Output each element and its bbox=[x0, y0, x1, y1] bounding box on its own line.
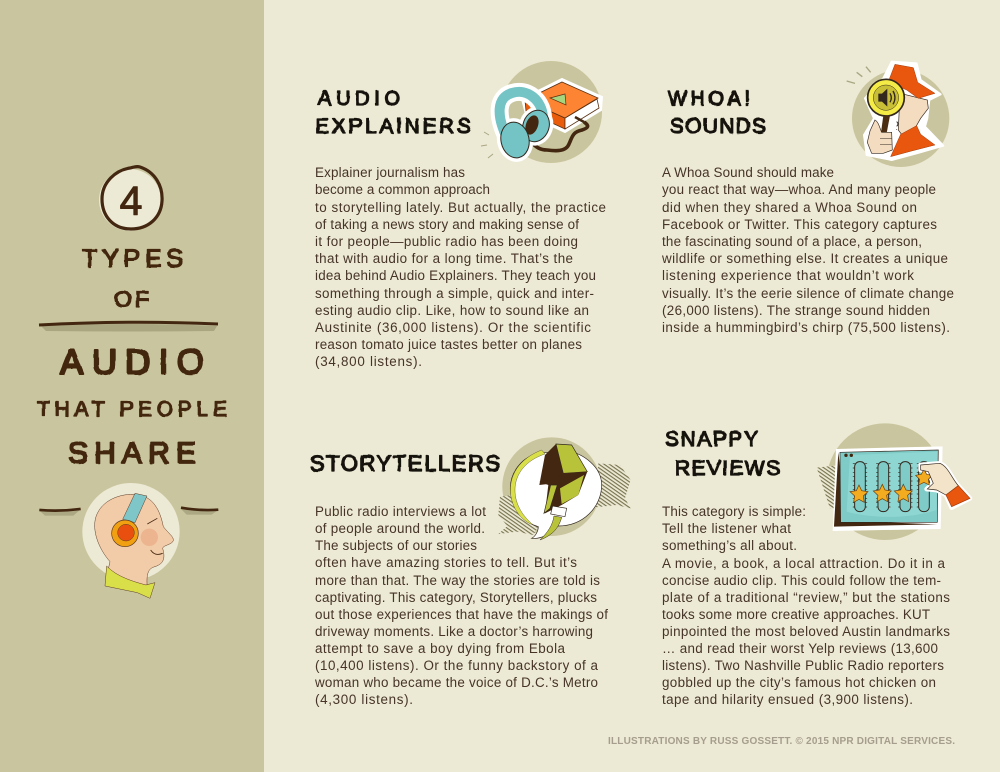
text: snappy reviews body: listens). Two Nashville Public Radio reporters bbox=[662, 658, 944, 673]
text: storytellers body: (10,400 listens). Or the funny backstory of a bbox=[315, 658, 599, 673]
heading: storytellers: STORYTELLERS bbox=[310, 451, 500, 476]
heading: types: TYPES bbox=[82, 245, 183, 273]
text: snappy reviews body: pinpointed the most beloved Austin landmarks bbox=[662, 624, 950, 639]
text: whoa sounds body: inside a hummingbird’s chirp (75,500 listens). bbox=[662, 320, 950, 335]
text: whoa sounds body: wildlife or something else. It creates a unique bbox=[661, 251, 948, 266]
text: audio explainers body: to storytelling lately. But actually, the practice bbox=[315, 200, 606, 215]
text: audio explainers body: Explainer journalism has bbox=[315, 165, 465, 180]
panel: storytellers bbox=[310, 437, 631, 707]
text: whoa sounds body: Facebook or Twitter. This category captures bbox=[662, 217, 937, 232]
text: snappy reviews body: gobbled up the city’s famous hot chicken on bbox=[662, 675, 936, 690]
heading: audio explainers bbox=[315, 88, 471, 138]
text: snappy reviews body: A movie, a book, a local attraction. Do it in a bbox=[662, 556, 946, 571]
panel: sidebar bbox=[0, 0, 264, 772]
heading: whoa sounds bbox=[668, 88, 766, 138]
icon: rating sliders with stars bbox=[817, 423, 970, 540]
text: audio explainers body: Austinite (36,000 listens). Or the scientific bbox=[315, 320, 591, 335]
text: audio explainers body: (34,800 listens). bbox=[315, 354, 422, 369]
text: whoa sounds body: A Whoa Sound should make bbox=[662, 165, 834, 180]
text: audio explainers body: of taking a news story and making sense of bbox=[315, 217, 579, 232]
text: whoa sounds body: visually. It’s the eerie silence of climate change bbox=[662, 286, 954, 301]
panel: audio explainers bbox=[315, 61, 606, 369]
text: audio explainers body: become a common approach bbox=[315, 182, 490, 197]
icon: detective with magnifying glass bbox=[847, 62, 949, 167]
text: storytellers body: attempt to save a boy dying from Ebola bbox=[315, 641, 566, 656]
text: storytellers body: out those experiences that have the makings of bbox=[315, 607, 608, 622]
text: storytellers body: The subjects of our stories bbox=[315, 538, 477, 553]
text: whoa sounds body: the fascinating sound of a place, a person, bbox=[662, 234, 922, 249]
heading: audio: AUDIO bbox=[60, 343, 204, 382]
text: storytellers body: captivating. This category, Storytellers, plucks bbox=[315, 590, 597, 605]
text: storytellers body: (4,300 listens). bbox=[315, 692, 413, 707]
heading: whoa sounds: SOUNDS bbox=[670, 115, 766, 138]
text: audio explainers body: reason tomato juice tastes better on planes bbox=[315, 337, 582, 352]
heading: that people: THAT PEOPLE bbox=[37, 398, 227, 421]
text: whoa sounds body: did when they shared a Whoa Sound on bbox=[662, 200, 917, 215]
heading: of: OF bbox=[114, 286, 149, 312]
text: storytellers body: often have amazing stories to tell. But it’s bbox=[315, 555, 577, 570]
icon: microphone in speech bubble bbox=[498, 437, 631, 540]
credit line: ILLUSTRATIONS BY RUSS GOSSETT. © 2015 NPR DIGITAL SERVICES. bbox=[608, 736, 955, 747]
text: snappy reviews body bbox=[662, 504, 950, 707]
heading: share: SHARE bbox=[68, 437, 196, 470]
text: snappy reviews body: plate of a traditional “review,” but the stations bbox=[662, 590, 950, 605]
text: whoa sounds body: listening experience that wouldn’t work bbox=[662, 268, 914, 283]
divider: top rule bbox=[39, 322, 218, 332]
text: whoa sounds body: you react that way—whoa. And many people bbox=[662, 182, 936, 197]
illustration: listener with headphones bbox=[39, 483, 218, 598]
text: whoa sounds body bbox=[661, 165, 954, 335]
text: audio explainers body: it for people—public radio has been doing bbox=[315, 234, 578, 249]
heading: snappy reviews: REVIEWS bbox=[675, 457, 780, 480]
text: snappy reviews body: something’s all about. bbox=[662, 538, 797, 553]
text: snappy reviews body: This category is simple: bbox=[662, 504, 806, 519]
text: storytellers body bbox=[314, 504, 608, 707]
heading: snappy reviews: SNAPPY bbox=[665, 428, 758, 451]
text: snappy reviews body: tooks some more creative approaches. KUT bbox=[662, 607, 930, 622]
text: storytellers body: more than that. The way the stories are told is bbox=[315, 573, 600, 588]
text: whoa sounds body: (26,000 listens). The strange sound hidden bbox=[662, 303, 930, 318]
text: audio explainers body: something through a simple, quick and inter- bbox=[315, 286, 594, 301]
text: audio explainers body: idea behind Audio Explainers. They teach you bbox=[315, 268, 596, 283]
heading: snappy reviews bbox=[665, 428, 780, 480]
text: snappy reviews body: … and read their worst Yelp reviews (13,600 bbox=[662, 641, 938, 656]
icon: number 4 in circle: 4 bbox=[120, 178, 142, 224]
panel: whoa sounds bbox=[661, 62, 954, 335]
icon: book and headphones bbox=[481, 61, 602, 165]
text: audio explainers body bbox=[315, 165, 606, 369]
heading: audio explainers: EXPLAINERS bbox=[315, 115, 471, 138]
heading: audio explainers: AUDIO bbox=[318, 88, 400, 110]
text: storytellers body: of people around the world. bbox=[315, 521, 485, 536]
icon: number 4 in circle bbox=[99, 167, 162, 231]
text: snappy reviews body: concise audio clip. This could follow the tem- bbox=[662, 573, 941, 588]
panel: snappy reviews bbox=[662, 423, 970, 707]
text: audio explainers body: that with audio for a long time. That’s the bbox=[315, 251, 573, 266]
text: snappy reviews body: tape and hilarity ensued (3,900 listens). bbox=[662, 692, 913, 707]
heading: whoa sounds: WHOA! bbox=[668, 88, 750, 110]
text: snappy reviews body: Tell the listener what bbox=[662, 521, 791, 536]
text: storytellers body: Public radio interviews a lot bbox=[315, 504, 486, 519]
text: storytellers body: driveway moments. Like a doctor’s harrowing bbox=[315, 624, 593, 639]
text: audio explainers body: esting audio clip. Like, how to sound like an bbox=[315, 303, 589, 318]
text: storytellers body: woman who became the voice of D.C.’s Metro bbox=[314, 675, 598, 690]
